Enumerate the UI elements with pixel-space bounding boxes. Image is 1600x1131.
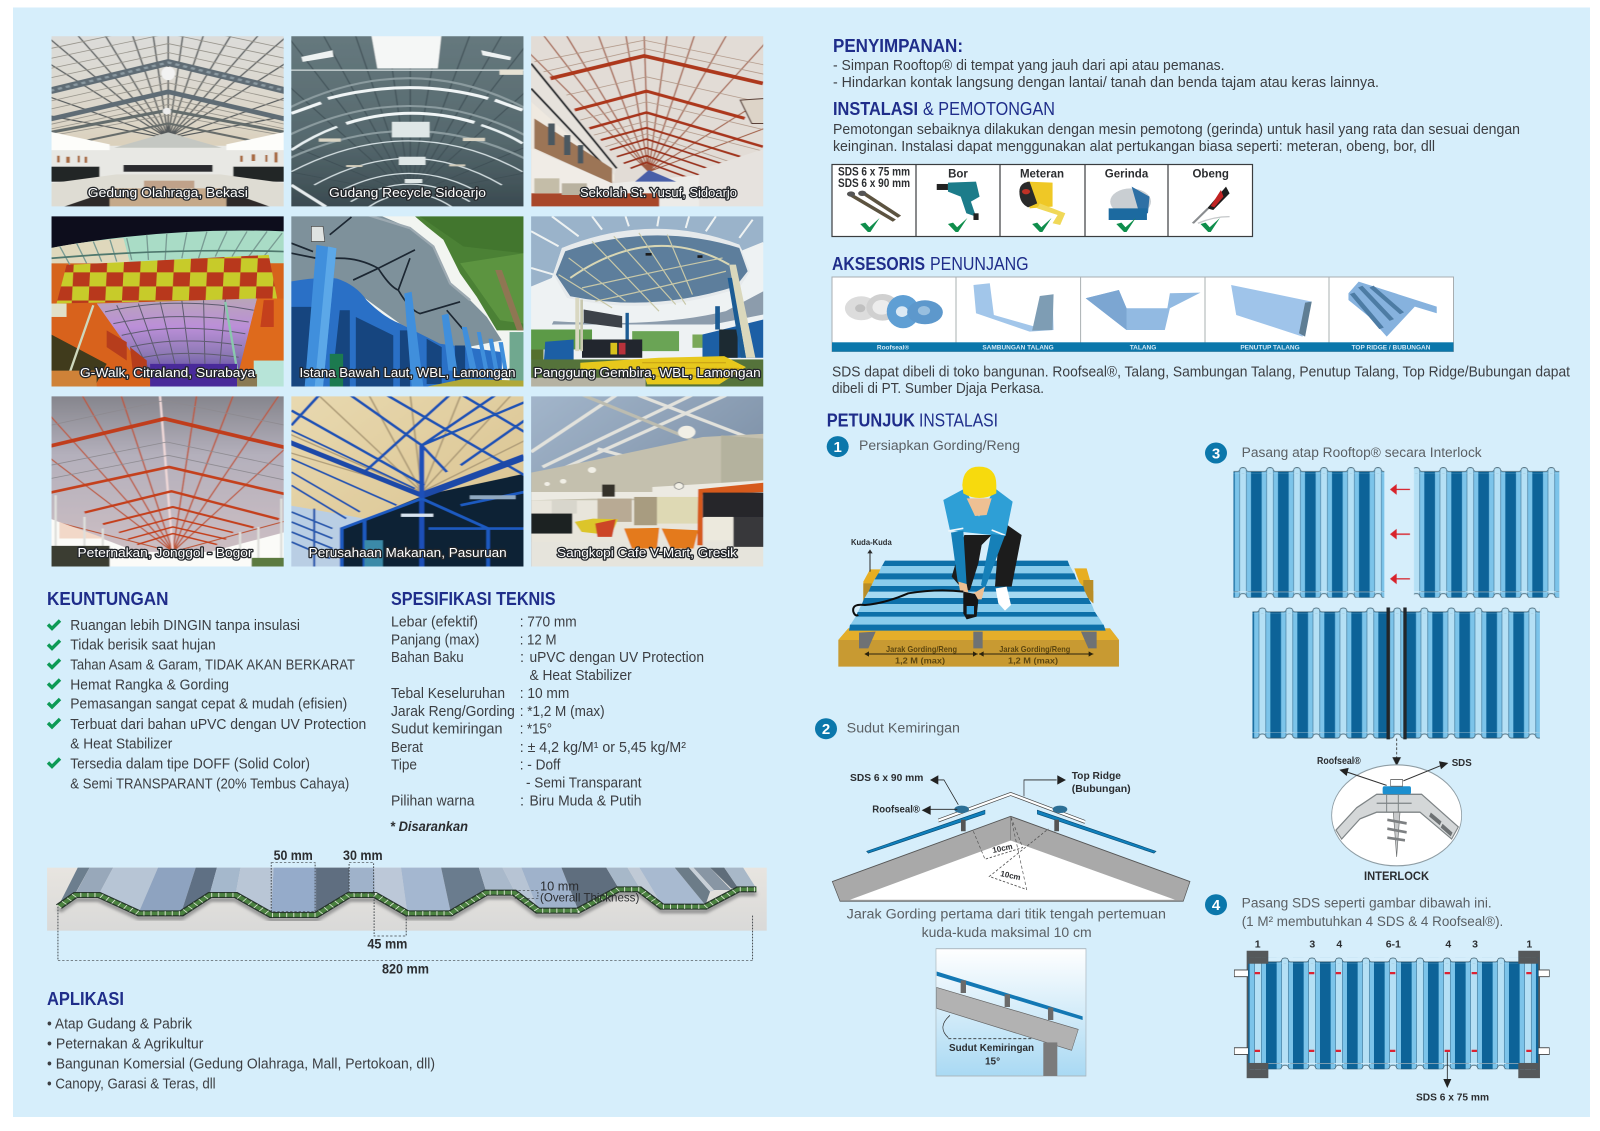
accessories text: dibeli di PT. Sumber Djaja Perkasa.: [832, 381, 1044, 397]
tool labels: Meteran: [1020, 169, 1064, 181]
benefit list: Terbuat dari bahan uPVC dengan UV Protection: [70, 717, 366, 733]
spec values: : *15°: [520, 722, 552, 738]
step 2 caption: [847, 906, 1166, 940]
label: sudut kemiringan: [949, 1043, 1034, 1068]
panel: keuntungan: [47, 588, 366, 792]
tool labels: Bor: [948, 169, 968, 181]
step 4 label: Pasang SDS seperti gambar dibawah ini.: [1242, 895, 1492, 910]
tool icons: [847, 182, 1230, 225]
photo: G-Walk: [50, 213, 287, 389]
dimension labels: 820 mm: [382, 960, 429, 976]
heading: aksesoris: AKSESORIS: [832, 253, 925, 274]
benefit list: Hemat Rangka & Gording: [70, 678, 229, 694]
spec values: : 12 M: [520, 632, 556, 648]
interlock labels: SDS: [1452, 757, 1472, 769]
spec values: & Heat Stabilizer: [530, 668, 632, 684]
panel: spesifikasi teknis: [390, 588, 704, 834]
chart: roof sheet cross-section: [47, 847, 767, 976]
spec values: [520, 614, 704, 810]
spec labels: Panjang (max): [391, 632, 479, 648]
accessory captions: SAMBUNGAN TALANG: [982, 344, 1054, 351]
labels: ridge: Roofseal®: [872, 804, 920, 816]
photo: Panggung Gembira: [528, 215, 766, 388]
storage text: - Hindarkan kontak langsung dengan lantai/ tanah dan benda tajam atau keras lainnya.: [833, 75, 1379, 91]
number badge 1: [827, 436, 849, 457]
panel: aplikasi: [47, 988, 435, 1092]
label: sudut kemiringan: Sudut Kemiringan: [949, 1043, 1034, 1054]
photo: Peternakan: [52, 396, 284, 566]
spec labels: Tipe: [391, 758, 417, 774]
photo: Gedung Olahraga: [52, 36, 284, 206]
accessory captions: PENUTUP TALANG: [1240, 344, 1300, 351]
sequence numbers: 1: [1526, 939, 1532, 951]
spec labels: Pilihan warna: [391, 794, 475, 810]
storage text: [833, 58, 1379, 91]
accessory captions: TALANG: [1130, 344, 1156, 351]
sequence numbers: 3: [1309, 939, 1315, 951]
application list: • Canopy, Garasi & Teras, dll: [47, 1076, 216, 1092]
spec values: : - Doff: [520, 758, 561, 774]
number badge 4: 4: [1212, 897, 1221, 914]
photo captions: Gudang Recycle Sidoarjo: [329, 185, 486, 200]
benefit list: Pemasangan sangat cepat & mudah (efisien): [70, 697, 347, 713]
photo captions: G-Walk, Citraland, Surabaya: [80, 365, 256, 380]
accessory captions: Roofseal®: [877, 343, 909, 351]
sheet profile: [59, 868, 756, 920]
instalasi text: Pemotongan sebaiknya dilakukan dengan mesin pemotong (gerinda) untuk hasil yang rata dan sesuai dengan: [833, 122, 1520, 138]
photo captions: Sangkopi Cafe V-Mart, Gresik: [557, 545, 738, 560]
spec values: - Semi Transparant: [526, 776, 642, 792]
heading: instalasi: & PEMOTONGAN: [923, 98, 1055, 119]
spec labels: Jarak Reng/Gording: [391, 704, 515, 720]
benefit list: Tahan Asam & Garam, TIDAK AKAN BERKARAT: [70, 658, 355, 674]
photo captions: Panggung Gembira, WBL, Lamongan: [534, 365, 761, 380]
step 2 label: Sudut Kemiringan: [847, 720, 960, 735]
application list: • Atap Gudang & Pabrik: [47, 1017, 193, 1033]
spec labels: [391, 614, 515, 810]
photo captions: Gedung Olahraga, Bekasi: [88, 185, 248, 200]
step 3 label: Pasang atap Rooftop® secara Interlock: [1242, 445, 1482, 460]
photo: Sekolah St. Yusuf: [531, 36, 764, 206]
dimension labels: 1,2 M (max): [1008, 655, 1058, 665]
label: kuda-kuda: Kuda-Kuda: [851, 537, 892, 547]
heading: instalasi: [833, 98, 1055, 119]
step 1 label: Persiapkan Gording/Reng: [859, 438, 1020, 453]
step 4: pasang sds: [1205, 894, 1549, 1104]
footnote: * Disarankan: [390, 818, 468, 834]
dimension labels: [886, 644, 1070, 665]
spec values: : ± 4,2 kg/M¹ or 5,45 kg/M²: [520, 740, 686, 756]
labels: ridge: (Bubungan): [1072, 783, 1131, 795]
heading: penyimpanan: PENYIMPANAN:: [833, 35, 963, 56]
photo captions: [78, 185, 761, 560]
step 2 caption: Jarak Gording pertama dari titik tengah pertemuan: [847, 906, 1166, 921]
dimension labels: 45 mm: [367, 936, 407, 952]
benefit list: Tidak berisik saat hujan: [70, 638, 216, 654]
accessory captions: [877, 343, 1431, 351]
tool labels: [838, 167, 1229, 190]
step 4 label: (1 M² membutuhkan 4 SDS & 4 Roofseal®).: [1242, 914, 1503, 929]
spec values: uPVC dengan UV Protection: [530, 650, 704, 666]
tools table: [832, 164, 1252, 236]
benefit list: Ruangan lebih DINGIN tanpa insulasi: [70, 618, 300, 634]
heading: aksesoris: PENUNJANG: [930, 253, 1029, 274]
photo: Istana Bawah Laut: [290, 210, 527, 389]
panel: penyimpanan: [833, 35, 1379, 91]
spec labels: Berat: [391, 740, 423, 756]
step 2 caption: kuda-kuda maksimal 10 cm: [922, 925, 1092, 940]
step 3: interlock: [1205, 442, 1559, 883]
benefit list: Tersedia dalam tipe DOFF (Solid Color): [70, 756, 310, 772]
illustration: sheets: [1233, 467, 1559, 766]
photo: Sangkopi Cafe: [529, 395, 767, 568]
dimension labels: [274, 847, 639, 976]
heading: petunjuk instalasi: [827, 410, 998, 431]
panel: aksesoris penunjang: [832, 253, 1570, 397]
labels: ridge: [850, 770, 1131, 882]
sequence numbers: 4: [1336, 939, 1342, 951]
number badge 2: 2: [822, 721, 830, 738]
photo captions: Perusahaan Makanan, Pasuruan: [309, 545, 507, 560]
label: sds 6x75: SDS 6 x 75 mm: [1416, 1092, 1489, 1104]
accessory captions: TOP RIDGE / BUBUNGAN: [1352, 344, 1431, 351]
instalasi text: [833, 122, 1520, 155]
application list: • Bangunan Komersial (Gedung Olahraga, Mall, Pertokoan, dll): [47, 1056, 435, 1072]
step 1: persiapkan gording: [827, 436, 1119, 667]
panel: instalasi dan pemotongan: [832, 98, 1520, 236]
spec labels: Bahan Baku: [391, 650, 464, 666]
interlock labels: Roofseal®: [1317, 755, 1361, 767]
heading: aplikasi: APLIKASI: [47, 988, 124, 1009]
dimension labels: 10 mm: [540, 879, 579, 894]
storage text: - Simpan Rooftop® di tempat yang jauh dari api atau pemanas.: [833, 58, 1224, 74]
sequence numbers: 6-1: [1386, 939, 1401, 951]
dimension labels: 50 mm: [274, 847, 313, 863]
labels: ridge: SDS 6 x 90 mm: [850, 772, 923, 784]
photo captions: Istana Bawah Laut, WBL, Lamongan: [300, 365, 516, 380]
section backdrop: [47, 868, 767, 931]
number badge 1: 1: [834, 439, 842, 456]
photo: Perusahaan Makanan: [291, 396, 524, 566]
sequence numbers: 1: [1255, 939, 1261, 951]
accessories text: [832, 365, 1570, 397]
heading: keuntungan: KEUNTUNGAN: [47, 588, 168, 609]
dimension labels: (Overall Thickness): [540, 891, 639, 905]
sequence numbers: [1255, 939, 1532, 951]
heading: aksesoris: [832, 253, 1029, 274]
illustration: interlock detail: [1332, 761, 1462, 866]
sequence numbers: 4: [1445, 939, 1451, 951]
illustration: roof ridge: [832, 775, 1190, 901]
tool labels: SDS 6 x 75 mm: [838, 167, 910, 179]
number badge 4: [1205, 894, 1227, 915]
spec values: : *1,2 M (max): [520, 704, 605, 720]
instalasi text: keinginan. Instalasi dapat menggunakan alat pertukangan biasa seperti: meteran, obeng, bor, dll: [833, 139, 1435, 155]
accessories text: SDS dapat dibeli di toko bangunan. Roofseal®, Talang, Sambungan Talang, Penutup Talang, Top Ridge/Bubungan dapat: [832, 365, 1570, 381]
step 4 label: [1242, 895, 1503, 929]
number badge 3: 3: [1212, 446, 1220, 462]
step 2: sudut kemiringan: [815, 718, 1190, 1076]
illustration: roof slope: [936, 949, 1086, 1076]
label: sudut kemiringan: 15°: [985, 1056, 1000, 1068]
icons: check marks: [860, 218, 1220, 232]
dimension labels: Jarak Gording/Reng: [999, 644, 1070, 654]
spec labels: Sudut kemiringan: [391, 722, 502, 738]
spec labels: Tebal Keseluruhan: [391, 686, 505, 702]
spec labels: Lebar (efektif): [391, 614, 478, 630]
spec values: :: [520, 650, 524, 666]
number badge 3: [1205, 442, 1227, 464]
spec values: : 10 mm: [520, 686, 569, 702]
application list: • Peternakan & Agrikultur: [47, 1036, 204, 1052]
heading: petunjuk instalasi: PETUNJUK: [827, 410, 916, 431]
spec values: :: [520, 794, 524, 810]
accessories strip: [832, 277, 1454, 352]
labels: ridge: 10cm: [1000, 869, 1021, 882]
interlock labels: [1317, 755, 1472, 883]
sequence numbers: 3: [1472, 939, 1478, 951]
heading: petunjuk instalasi: INSTALASI: [919, 410, 998, 431]
benefit list: [70, 618, 366, 792]
illustration: sds positions: [1234, 951, 1549, 1088]
spec values: Biru Muda & Putih: [530, 794, 642, 810]
photo captions: Peternakan, Jonggol - Bogor: [78, 545, 253, 560]
photo captions: Sekolah St. Yusuf, Sidoarjo: [580, 185, 737, 200]
panel: photo gallery: [0, 24, 818, 568]
interlock labels: INTERLOCK: [1364, 869, 1429, 883]
heading: spesifikasi: SPESIFIKASI TEKNIS: [391, 588, 556, 609]
labels: ridge: Top Ridge: [1072, 770, 1121, 782]
application list: [47, 1017, 435, 1092]
icons: green check marks: [48, 620, 60, 766]
photo: Gudang Recycle: [291, 36, 524, 206]
tool labels: Obeng: [1192, 169, 1229, 181]
accessory images: [845, 282, 1437, 337]
tool labels: SDS 6 x 90 mm: [838, 178, 910, 190]
illustration: worker on roof: [838, 467, 1119, 667]
number badge 2: [815, 718, 837, 739]
dimension guides: [58, 863, 753, 961]
dimension labels: 1,2 M (max): [895, 655, 945, 665]
dimension labels: Jarak Gording/Reng: [886, 644, 957, 654]
tool labels: Gerinda: [1105, 169, 1149, 181]
dimension labels: 30 mm: [343, 847, 383, 863]
heading: instalasi: INSTALASI: [833, 98, 918, 119]
labels: ridge: 10cm: [992, 842, 1013, 855]
benefit list: & Heat Stabilizer: [70, 737, 172, 753]
benefit list: & Semi TRANSPARANT (20% Tembus Cahaya): [70, 776, 349, 792]
spec values: : 770 mm: [520, 614, 577, 630]
